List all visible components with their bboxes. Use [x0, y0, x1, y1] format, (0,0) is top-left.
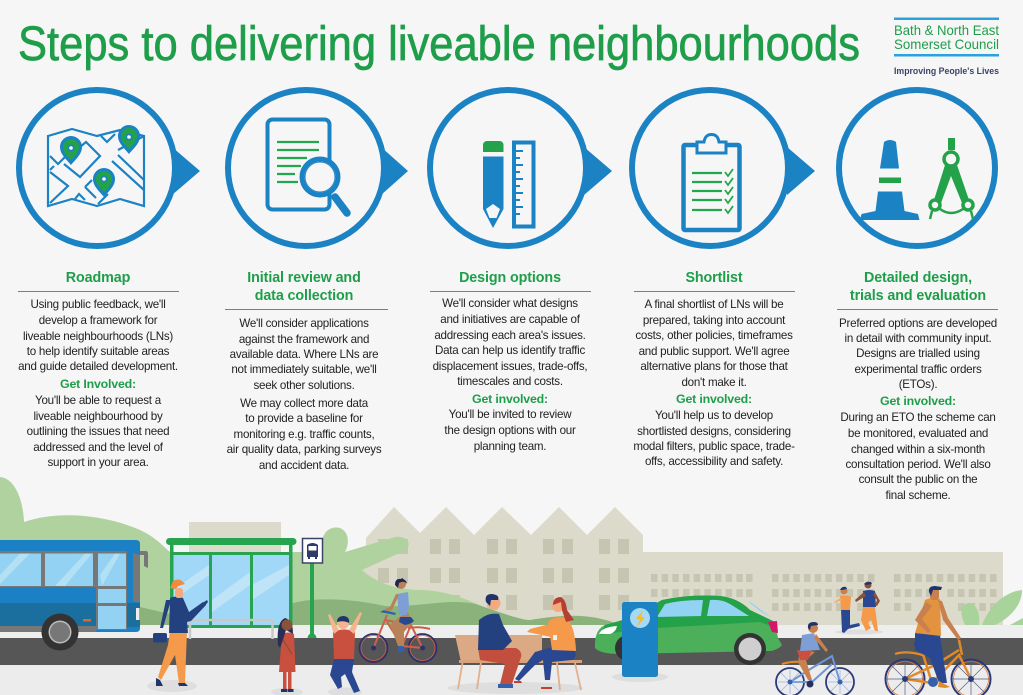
- icon: map: [48, 129, 144, 206]
- step circle 5: traffic cone and compass icon: [839, 90, 995, 246]
- get involved: Detailed design: consultation period. We'll also: [845, 458, 991, 471]
- heading: Detailed design, trials and evaluation: [850, 270, 986, 304]
- body text: Shortlist: alternative plans for those that: [640, 360, 789, 373]
- body text: Initial review: to provide a baseline for: [245, 412, 363, 425]
- get involved: Roadmap: support in your area.: [47, 456, 149, 469]
- heading: Initial review and data collection: data collection: [255, 288, 353, 304]
- heading: Initial review and data collection: Initial review and: [247, 270, 361, 286]
- get involved: Detailed design: [840, 394, 996, 502]
- get involved: Design options: the design options with our: [444, 424, 576, 437]
- get involved: Detailed design: be monitored, evaluated and: [848, 427, 988, 440]
- person: child cycling: [776, 622, 854, 695]
- body text: Roadmap: [18, 298, 178, 373]
- body text: Initial review: not immediately suitable, we'll: [231, 363, 377, 376]
- get involved: Roadmap: addressed and the level of: [33, 441, 164, 454]
- get involved: Roadmap: liveable neighbourhood by: [33, 410, 163, 423]
- icon: magnifier: [302, 159, 347, 213]
- car: [595, 596, 782, 665]
- body text: Shortlist: [635, 298, 793, 389]
- panel: Initial review and data collection: [225, 270, 388, 472]
- heading: Design options: Design options: [459, 270, 561, 286]
- pavement and road: [0, 625, 1023, 695]
- person: boy with raised arms: [328, 612, 362, 695]
- people: two joggers: [834, 582, 883, 634]
- get involved: Shortlist: You'll help us to develop: [655, 409, 773, 422]
- panel: Roadmap: [18, 270, 179, 469]
- step circle 1: map icon: [19, 90, 200, 246]
- person: girl in red dress: [271, 618, 303, 695]
- logo: Bath & North East Somerset Council: Bath & North East: [894, 22, 999, 38]
- body text: Initial review: against the framework and: [239, 333, 369, 346]
- icon: ruler: [514, 142, 534, 226]
- get involved: Design options: planning team.: [474, 440, 546, 453]
- get involved: Roadmap: [27, 377, 169, 469]
- get involved: Shortlist: Get involved:: [676, 392, 752, 406]
- person: woman cycling: [360, 578, 436, 662]
- body text: Detailed design: Preferred options are developed: [839, 317, 997, 330]
- body text: Shortlist: don't make it.: [681, 376, 747, 389]
- body text: Detailed design: experimental traffic orders: [854, 363, 982, 376]
- body text: Shortlist: and public support. We'll agree: [639, 345, 789, 358]
- body text: Design options: We'll consider what designs: [442, 297, 578, 310]
- body text: Design options: [433, 297, 587, 388]
- icon: map pins: [60, 125, 140, 197]
- logo: Bath & North East Somerset Council: Somerset Council: [894, 36, 999, 52]
- body text: Roadmap: develop a framework for: [39, 314, 158, 327]
- person: man with hat and phone: [147, 580, 208, 692]
- background hills and bushes: [0, 477, 620, 625]
- body text: Design options: displacement issues, trade-offs,: [433, 360, 587, 373]
- body text: Design options: addressing each area's issues.: [434, 329, 586, 342]
- body text: Detailed design: (ETOs).: [899, 378, 937, 391]
- body text: Roadmap: Using public feedback, we'll: [30, 298, 166, 311]
- body text: Shortlist: costs, other policies, timeframes: [635, 329, 793, 342]
- body text: Initial review: air quality data, parking surveys: [227, 443, 382, 456]
- heading: Initial review and data collection: [247, 270, 361, 304]
- body text: Detailed design: Designs are trialled using: [856, 347, 980, 360]
- get involved: Detailed design: final scheme.: [885, 489, 951, 502]
- get involved: Shortlist: offs, accessibility and safety.: [645, 455, 783, 468]
- EV charging post: [612, 602, 668, 682]
- step circle 2: document and magnifier icon: [228, 90, 408, 246]
- heading: Detailed design, trials and evaluation: Detailed design,: [864, 270, 972, 286]
- body text: Roadmap: and guide detailed development.: [18, 360, 178, 373]
- heading: Detailed design, trials and evaluation: trials and evaluation: [850, 288, 986, 304]
- body text: Detailed design: [839, 317, 997, 391]
- icon: traffic cone: [860, 140, 920, 220]
- get involved: Design options: Get involved:: [472, 392, 548, 406]
- panel: Detailed design, trials and evaluation: [837, 270, 998, 502]
- step circle 3: pencil and ruler icon: [430, 90, 612, 246]
- body text: Detailed design: in detail with community input.: [845, 332, 991, 345]
- title: Steps to delivering liveable neighbourhoods: [18, 18, 860, 71]
- body text: Initial review: and accident data.: [259, 459, 349, 472]
- body text: Shortlist: prepared, taking into account: [643, 314, 786, 327]
- bus shelter: [166, 538, 296, 639]
- icon: clipboard: [684, 134, 740, 230]
- panel: Design options: [430, 270, 591, 453]
- get involved: Detailed design: changed within a six-month: [851, 443, 985, 456]
- body text: Initial review: available data. Where LNs are: [230, 348, 378, 361]
- bench: [447, 635, 583, 694]
- get involved: Detailed design: During an ETO the scheme can: [840, 411, 996, 424]
- person: woman on bench: [514, 597, 576, 689]
- body text: Initial review: We'll consider applications: [239, 317, 369, 330]
- body text: Initial review: seek other solutions.: [253, 379, 355, 392]
- person: man cycling: [886, 586, 990, 695]
- background buildings: [189, 507, 1003, 625]
- get involved: Roadmap: You'll be able to request a: [35, 394, 162, 407]
- get involved: Design options: [444, 392, 576, 453]
- body text: Roadmap: liveable neighbourhoods (LNs): [23, 330, 173, 343]
- car wheel: [734, 633, 766, 665]
- get involved: Design options: You'll be invited to review: [449, 408, 572, 421]
- step circle 4: clipboard icon: [632, 90, 815, 246]
- body text: Design options: and initiatives are capable of: [440, 313, 581, 326]
- illustration: street scene: [0, 477, 1023, 695]
- bus stop sign: [302, 538, 322, 638]
- logo: Bath & North East Somerset Council: [894, 18, 999, 77]
- person: man on bench: [478, 594, 521, 688]
- logo: Bath & North East Somerset Council: Improving People's Lives: [894, 66, 999, 77]
- body text: Initial review: We may collect more data: [240, 397, 369, 410]
- get involved: Roadmap: Get Involved:: [60, 377, 136, 391]
- icon: document: [268, 120, 330, 210]
- get involved: Shortlist: shortlisted designs, considering: [637, 425, 791, 438]
- body text: Shortlist: A final shortlist of LNs will be: [645, 298, 783, 311]
- bus wheel: [42, 614, 78, 650]
- body text: Initial review: monitoring e.g. traffic counts,: [234, 428, 374, 441]
- heading: Roadmap: Roadmap: [66, 270, 131, 286]
- icon: compass: [930, 138, 973, 219]
- get involved: Shortlist: modal filters, public space, trade-: [633, 440, 795, 453]
- body text: Design options: Data can help us identify traffic: [435, 344, 585, 357]
- body text: Roadmap: to help identify suitable areas: [27, 345, 170, 358]
- heading: Shortlist: Shortlist: [685, 270, 743, 286]
- icon: pencil: [483, 141, 504, 228]
- bus: [0, 540, 148, 650]
- get involved: Roadmap: outlining the issues that need: [27, 425, 169, 438]
- get involved: Detailed design: consult the public on the: [859, 473, 977, 486]
- body text: Design options: timescales and costs.: [457, 375, 563, 388]
- get involved: Shortlist: [633, 392, 795, 468]
- plants at right: [961, 590, 1023, 625]
- get involved: Detailed design: Get involved:: [880, 394, 956, 408]
- panel: Shortlist: [633, 270, 795, 468]
- body text: Initial review: [227, 317, 382, 472]
